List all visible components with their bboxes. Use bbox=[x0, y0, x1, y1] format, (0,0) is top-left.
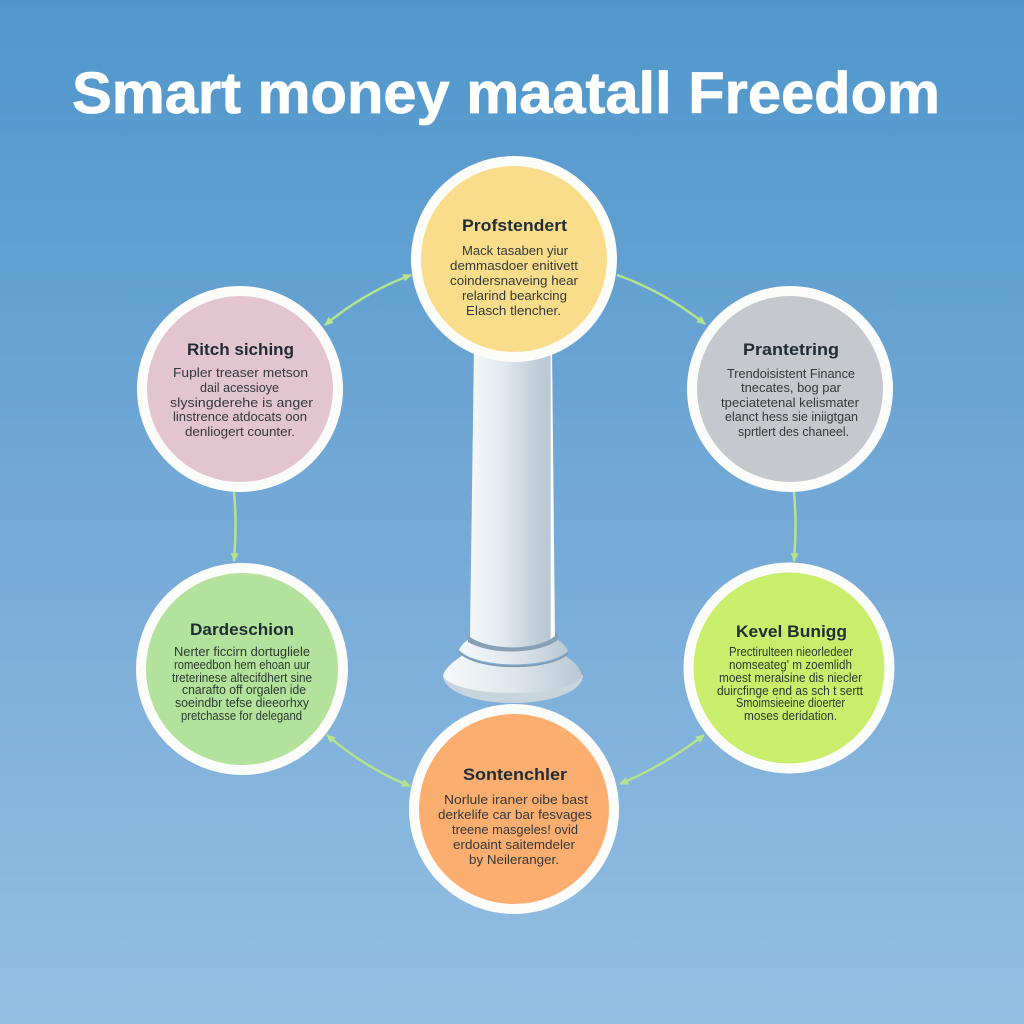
text block: derkelife car bar fesvages bbox=[438, 807, 593, 822]
text block bbox=[717, 645, 864, 723]
arrow: top to left bbox=[325, 275, 411, 325]
panel: Prantetring bbox=[692, 291, 888, 487]
text block: tnecates, bog par bbox=[741, 380, 842, 395]
text block bbox=[721, 366, 860, 439]
title: Smart money maatall Freedom bbox=[72, 61, 940, 126]
heading: Prantetring bbox=[743, 340, 839, 359]
pillar base bbox=[443, 633, 583, 703]
text block: cnarafto off orgalen ide bbox=[182, 683, 306, 697]
arrow: lower left to bottom bbox=[327, 735, 410, 786]
panel: Kevel Bunigg bbox=[688, 568, 890, 768]
text block: demmasdoer enitivett bbox=[450, 258, 578, 273]
heading: Dardeschion bbox=[190, 620, 294, 639]
text block: pretchasse for delegand bbox=[181, 709, 302, 723]
panel: Profstendert bbox=[416, 161, 612, 357]
pillar bbox=[443, 345, 583, 703]
text block: Nerter ficcirn dortugliele bbox=[174, 645, 310, 659]
panel: Dardeschion bbox=[141, 568, 343, 770]
heading: Ritch siching bbox=[187, 340, 294, 359]
heading: Sontenchler bbox=[463, 765, 567, 784]
text block: sprtlert des chaneel. bbox=[738, 424, 849, 439]
text block bbox=[170, 365, 314, 439]
heading: Profstendert bbox=[462, 216, 567, 235]
arrow: left to lower left bbox=[234, 492, 236, 561]
text block: Elasch tlencher. bbox=[466, 303, 561, 318]
pillar shaft bbox=[470, 345, 555, 647]
panel: Sontenchler bbox=[414, 709, 614, 909]
panel: Ritch siching bbox=[142, 291, 338, 487]
text block: dail acessioye bbox=[200, 380, 279, 395]
text block: coindersnaveing hear bbox=[450, 273, 579, 288]
arrow: right to lower right bbox=[794, 492, 796, 561]
text block bbox=[438, 792, 593, 867]
arrows between circles bbox=[234, 275, 796, 786]
text block: Fupler treaser metson bbox=[173, 365, 308, 380]
text block: duircfinge end as sch t sertt bbox=[717, 684, 864, 698]
text block: soeindbr tefse dieeorhxy bbox=[175, 696, 310, 710]
text block: Trendoisistent Finance bbox=[727, 366, 855, 381]
text block: Prectirulteen nieorledeer bbox=[729, 645, 853, 659]
text block: denliogert counter. bbox=[185, 424, 295, 439]
text block: treterinese altecifdhert sine bbox=[172, 671, 312, 685]
text block: moses deridation. bbox=[744, 709, 837, 723]
heading: Kevel Bunigg bbox=[736, 622, 847, 641]
text block: Mack tasaben yiur bbox=[462, 243, 569, 258]
text block: romeedbon hem ehoan uur bbox=[174, 658, 310, 672]
text block: nomseateg' m zoemlidh bbox=[729, 658, 852, 672]
text block: linstrence atdocats oon bbox=[173, 409, 307, 424]
arrow: bottom to lower right bbox=[620, 735, 704, 784]
text block: erdoaint saitemdeler bbox=[453, 837, 576, 852]
text block: moest meraisine dis niecler bbox=[719, 671, 862, 685]
text block: treene masgeles! ovid bbox=[452, 822, 578, 837]
text block: relarind bearkcing bbox=[462, 288, 567, 303]
text block bbox=[172, 645, 312, 723]
arrow: top to right bbox=[617, 275, 705, 324]
text block: tpeciatetenal kelismater bbox=[721, 395, 860, 410]
text block: elanct hess sie iniigtgan bbox=[725, 409, 858, 424]
text block: slysingderehe is anger bbox=[170, 395, 314, 410]
text block: by Neileranger. bbox=[469, 852, 559, 867]
text block: Smoimsieeine dioerter bbox=[736, 696, 845, 710]
text block bbox=[450, 243, 579, 318]
text block: Norlule iraner oibe bast bbox=[444, 792, 588, 807]
